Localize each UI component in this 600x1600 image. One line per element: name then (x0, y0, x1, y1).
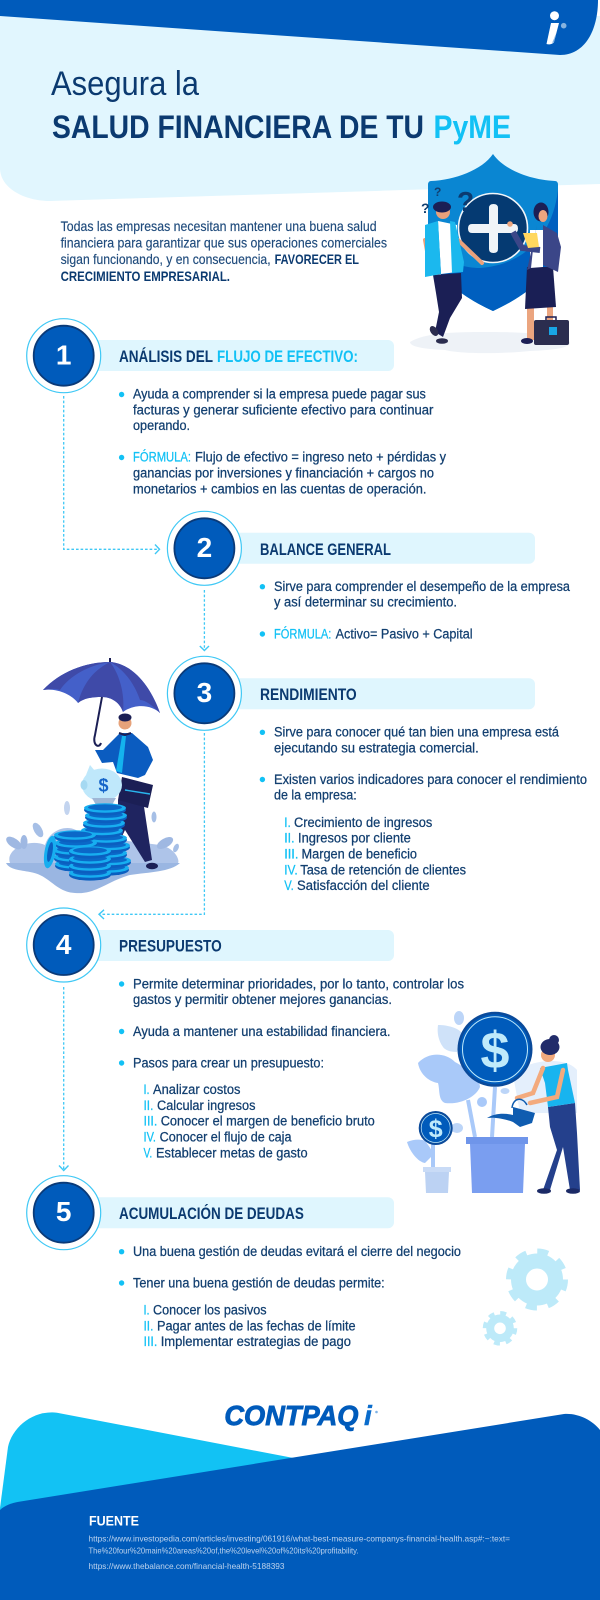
list of debt management points: III. (144, 1334, 157, 1349)
list of debt management points: Pagar antes de las fechas de límite (157, 1318, 356, 1333)
illustration: woman watering money plants: $ (429, 1115, 443, 1143)
number badge 1: 1 (56, 340, 71, 370)
bullet 1.1: Ayuda a comprender si la empresa puede pagar sus (133, 387, 426, 402)
number badge 3 (167, 656, 241, 730)
number badge 4 (27, 908, 101, 982)
list of debt management points: Conocer los pasivos (153, 1302, 267, 1317)
intro text block: Todas las empresas necesitan mantener una buena salud (61, 218, 377, 234)
list of debt management points (144, 1302, 356, 1349)
intro text block: sigan funcionando, y en consecuencia, (61, 251, 271, 267)
bullet 2.2 (260, 626, 473, 641)
list of performance indicators: Tasa de retención de clientes (300, 862, 466, 877)
header bar 4 (80, 930, 394, 961)
source block: FUENTE (89, 1513, 139, 1529)
list of performance indicators: Crecimiento de ingresos (294, 815, 433, 830)
illustration: shield with two people: ? (457, 186, 474, 217)
bullet 1.1: facturas y generar suficiente efectivo para continuar (133, 402, 434, 417)
footer: dark blue panel (0, 1414, 600, 1600)
bullet 1.2: monetarios + cambios en las cuentas de operación. (133, 481, 426, 496)
bullet 3.1 (260, 725, 559, 755)
list of budget steps: III. (144, 1114, 157, 1129)
list of budget steps: Conocer el flujo de caja (160, 1130, 292, 1145)
bullet 2.1 (260, 579, 570, 610)
bullet 5.1: Una buena gestión de deudas evitará el cierre del negocio (133, 1244, 461, 1259)
heading 2: BALANCE GENERAL (260, 540, 391, 559)
logo: CONTPAQi: CONTPAQ (224, 1400, 359, 1431)
list of budget steps (144, 1082, 375, 1161)
arrow: step 3 to step 4 (99, 733, 204, 919)
illustration: woman watering money plants: $ (481, 1022, 510, 1080)
section 4: presupuesto (27, 908, 464, 1161)
list of budget steps: Establecer metas de gasto (156, 1146, 308, 1161)
heading 1: FLUJO DE EFECTIVO: (217, 347, 358, 366)
bullet 3.2 (260, 772, 587, 803)
list of debt management points: Implementar estrategias de pago (161, 1334, 351, 1349)
bullet 1.1 (119, 387, 434, 433)
bullet 4.1: Permite determinar prioridades, por lo tanto, controlar los (133, 976, 464, 991)
list of performance indicators: I. (284, 815, 291, 830)
source block: https://www.thebalance.com/financial-health-5188393 (88, 1562, 285, 1571)
icon: large gear (509, 1252, 565, 1308)
arrow: step 4 to step 5 (59, 987, 68, 1170)
bullet 3.2: Existen varios indicadores para conocer el rendimiento (274, 772, 587, 787)
section 3: rendimiento (167, 656, 587, 893)
illustration: man with umbrella, piggy bank and coins: $ (98, 776, 109, 796)
heading 1: ANÁLISIS DEL (119, 347, 213, 366)
list of budget steps: II. (144, 1098, 153, 1113)
bullet 4.1: gastos y permitir obtener mejores ganancias. (133, 992, 392, 1007)
list of performance indicators (284, 815, 466, 893)
bullet 3.1: ejecutando su estrategia comercial. (274, 740, 479, 755)
illustration: shield with two people (410, 154, 570, 353)
bullet 1.2: ganancias por inversiones y financiación + cargos no (133, 466, 434, 481)
header background: light blue panel (0, 16, 600, 201)
bullet 5.2: Tener una buena gestión de deudas permite: (133, 1275, 385, 1290)
bullet 4.2: Ayuda a mantener una estabilidad financiera. (133, 1024, 390, 1039)
source block (88, 1513, 510, 1571)
number badge 2 (167, 511, 241, 585)
number badge 1 (27, 319, 101, 393)
bullet 3.2: de la empresa: (274, 788, 357, 803)
title (51, 65, 511, 145)
heading 4: PRESUPUESTO (119, 937, 222, 956)
bullet 2.2: FÓRMULA: (274, 626, 331, 641)
list of budget steps: V. (144, 1146, 152, 1161)
section 5: acumulacion de deudas (27, 1176, 461, 1349)
title: PyME (434, 109, 511, 145)
illustration: woman watering money plants (407, 1011, 580, 1194)
bullet 2.1: y así determinar su crecimiento. (274, 595, 457, 610)
list of performance indicators: Ingresos por cliente (298, 831, 411, 846)
bullet 4.3: Pasos para crear un presupuesto: (133, 1055, 324, 1070)
illustration: shield with two people: ? (421, 200, 430, 216)
list of performance indicators: V. (284, 878, 294, 893)
list of budget steps: Analizar costos (153, 1082, 241, 1097)
list of performance indicators: Satisfacción del cliente (297, 878, 430, 893)
number badge 4: 4 (56, 929, 72, 960)
header background: dark blue band (0, 0, 598, 55)
number badge 2: 2 (197, 532, 212, 563)
list of performance indicators: IV. (284, 862, 298, 877)
source block: https://www.investopedia.com/articles/investing/061916/what-best-measure-companys-financial-health.asp#:~:text= (88, 1535, 510, 1544)
number badge 3: 3 (197, 677, 212, 708)
list of performance indicators: Margen de beneficio (302, 846, 417, 861)
title: SALUD FINANCIERA DE TU (52, 109, 424, 145)
bullet 1.2: Flujo de efectivo = ingreso neto + pérdidas y (195, 450, 446, 465)
intro text block: FAVORECER EL (275, 251, 359, 267)
source block: The%20four%20main%20areas%20of,the%20level%20of%20its%20profitability. (88, 1546, 358, 1555)
bullet 2.2: Activo= Pasivo + Capital (336, 626, 473, 641)
intro text block: financiera para garantizar que sus operaciones comerciales (61, 234, 387, 250)
list of performance indicators: II. (284, 831, 295, 846)
section 1: flujo de efectivo (27, 319, 446, 496)
title: Asegura la (51, 65, 199, 103)
heading 5: ACUMULACIÓN DE DEUDAS (119, 1204, 304, 1223)
list of budget steps: Conocer el margen de beneficio bruto (161, 1114, 375, 1129)
arrow: step 2 to step 3 (200, 590, 209, 650)
bullet 3.1: Sirve para conocer qué tan bien una empresa está (274, 725, 559, 740)
icon: brand i logo (546, 11, 566, 44)
list of budget steps: Calcular ingresos (157, 1098, 256, 1113)
header bar 5 (80, 1197, 394, 1228)
header bar 3 (220, 678, 535, 709)
bullet 1.1: operando. (133, 418, 190, 433)
logo: CONTPAQi: i (364, 1400, 373, 1431)
arrow: step 1 to step 2 (64, 396, 160, 554)
bullet 4.1 (119, 976, 464, 1007)
list of debt management points: II. (144, 1318, 153, 1333)
intro text block (61, 218, 387, 284)
bullet 2.1: Sirve para comprender el desempeño de la empresa (274, 579, 570, 594)
intro text block: CRECIMIENTO EMPRESARIAL. (61, 268, 230, 284)
header bar 1 (80, 340, 394, 371)
number badge 5 (27, 1176, 101, 1250)
header bar 2 (220, 533, 535, 564)
illustration: man with umbrella, piggy bank and coins (4, 658, 180, 893)
illustration: shield with two people: ? (434, 185, 441, 199)
bullet 1.2: FÓRMULA: (133, 450, 191, 465)
icon: small gear (485, 1313, 515, 1343)
heading 3: RENDIMIENTO (260, 685, 357, 704)
number badge 5: 5 (56, 1196, 71, 1227)
list of budget steps: IV. (144, 1130, 156, 1145)
heading 1 (119, 347, 358, 366)
list of budget steps: I. (144, 1082, 150, 1097)
section 2: balance general (167, 511, 570, 641)
bullet 1.2 (119, 450, 446, 496)
list of debt management points: I. (144, 1302, 150, 1317)
footer: light blue wave (0, 1412, 300, 1520)
list of performance indicators: III. (284, 846, 298, 861)
